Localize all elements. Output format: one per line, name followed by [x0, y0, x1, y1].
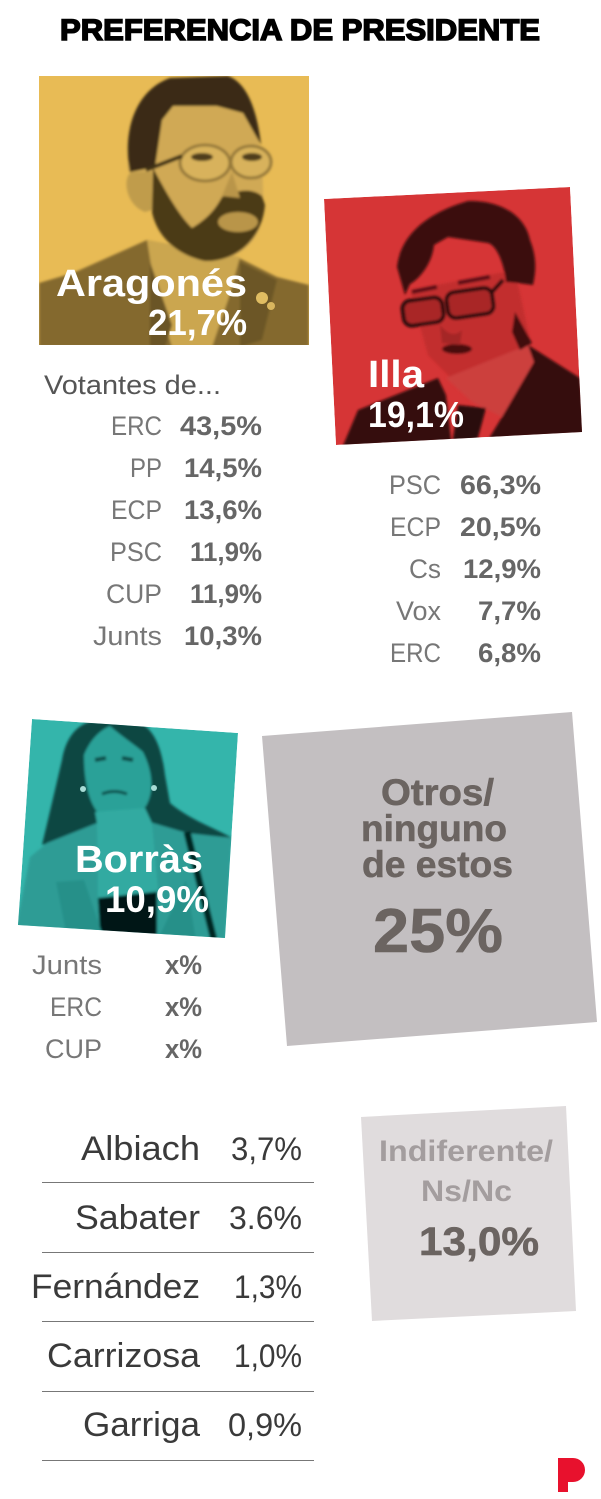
panel: Aragonés voters table	[44, 370, 262, 651]
panel: Illa voters table: ECP	[390, 512, 441, 542]
value: 13,0%: 13,0%	[419, 1220, 539, 1264]
panel: Aragonés portrait	[39, 76, 309, 347]
panel: Aragonés voters table: PP	[130, 453, 162, 483]
panel: other candidates list	[31, 1130, 314, 1461]
panel: Borràs voters table: Junts	[32, 950, 102, 980]
panel: Aragonés voters table: ECP	[111, 495, 162, 525]
panel: Aragonés voters table: 10,3%	[184, 621, 262, 651]
panel: otros / ninguno: de estos	[362, 844, 513, 885]
label: 10,9%: 10,9%	[105, 879, 209, 920]
panel: Aragonés voters table: CUP	[106, 579, 162, 609]
panel: Illa voters table: PSC	[389, 470, 441, 500]
panel: otros / ninguno	[262, 712, 597, 1046]
label: 21,7%: 21,7%	[148, 302, 247, 343]
panel: Illa voters table: Vox	[396, 596, 441, 626]
panel: Illa voters table: 66,3%	[460, 470, 541, 500]
panel: other candidates list: 3.6%	[229, 1200, 302, 1236]
value: 25%: 25%	[373, 897, 503, 966]
panel: Borràs voters table: x%	[165, 992, 202, 1022]
panel: otros / ninguno: ninguno	[361, 808, 507, 849]
panel: Borràs voters table	[32, 950, 202, 1064]
panel: indiferente: Ns/Nc	[421, 1175, 512, 1208]
panel: other candidates list: 1,0%	[234, 1338, 302, 1374]
panel: Aragonés voters table: PSC	[110, 537, 162, 567]
panel: Aragonés voters table: Junts	[93, 621, 162, 651]
panel: indiferente: Indiferente/	[379, 1135, 554, 1168]
panel: Aragonés voters table: 43,5%	[180, 411, 262, 441]
panel: Borràs portrait	[16, 719, 238, 942]
panel: Borràs voters table: x%	[165, 1034, 202, 1064]
panel: Aragonés voters table: 14,5%	[184, 453, 262, 483]
panel: Illa voters table: 12,9%	[463, 554, 541, 584]
panel: indiferente	[361, 1106, 576, 1321]
panel: other candidates list: 1,3%	[234, 1269, 302, 1305]
panel: other candidates list: 3,7%	[231, 1131, 302, 1167]
panel: Illa voters table: 20,5%	[460, 512, 541, 542]
label: Aragonés: Aragonés	[56, 263, 247, 305]
panel: Illa voters table: Cs	[409, 554, 441, 584]
panel: Borràs voters table: ERC	[50, 992, 102, 1022]
panel: Borràs voters table: x%	[165, 950, 202, 980]
panel: Illa voters table: 6,8%	[478, 638, 541, 668]
label: Borràs: Borràs	[75, 839, 203, 881]
panel: Aragonés voters table: 11,9%	[190, 537, 262, 567]
panel: other candidates list: Garriga	[83, 1406, 200, 1444]
panel: Illa voters table: ERC	[390, 638, 441, 668]
label: 19,1%: 19,1%	[368, 394, 464, 435]
panel: otros / ninguno: Otros/	[381, 772, 494, 813]
voters heading: Votantes de...	[44, 370, 221, 400]
panel: other candidates list: 0,9%	[228, 1407, 302, 1443]
panel: other candidates list: Albiach	[81, 1130, 200, 1168]
panel: Borràs voters table: CUP	[45, 1034, 102, 1064]
panel: Illa voters table	[389, 470, 541, 668]
panel: other candidates list: Carrizosa	[47, 1337, 200, 1375]
icon: P logo	[558, 1458, 585, 1492]
title: PREFERENCIA DE PRESIDENTE	[60, 14, 540, 47]
panel: Aragonés voters table: 11,9%	[190, 579, 262, 609]
panel: Aragonés voters table: ERC	[111, 411, 162, 441]
panel: Aragonés voters table: 13,6%	[184, 495, 262, 525]
panel: other candidates list: Sabater	[75, 1199, 200, 1237]
panel: Illa voters table: 7,7%	[478, 596, 541, 626]
panel: other candidates list: Fernández	[31, 1268, 200, 1306]
panel: Illa portrait	[324, 187, 586, 448]
label: Illa: Illa	[368, 354, 425, 396]
